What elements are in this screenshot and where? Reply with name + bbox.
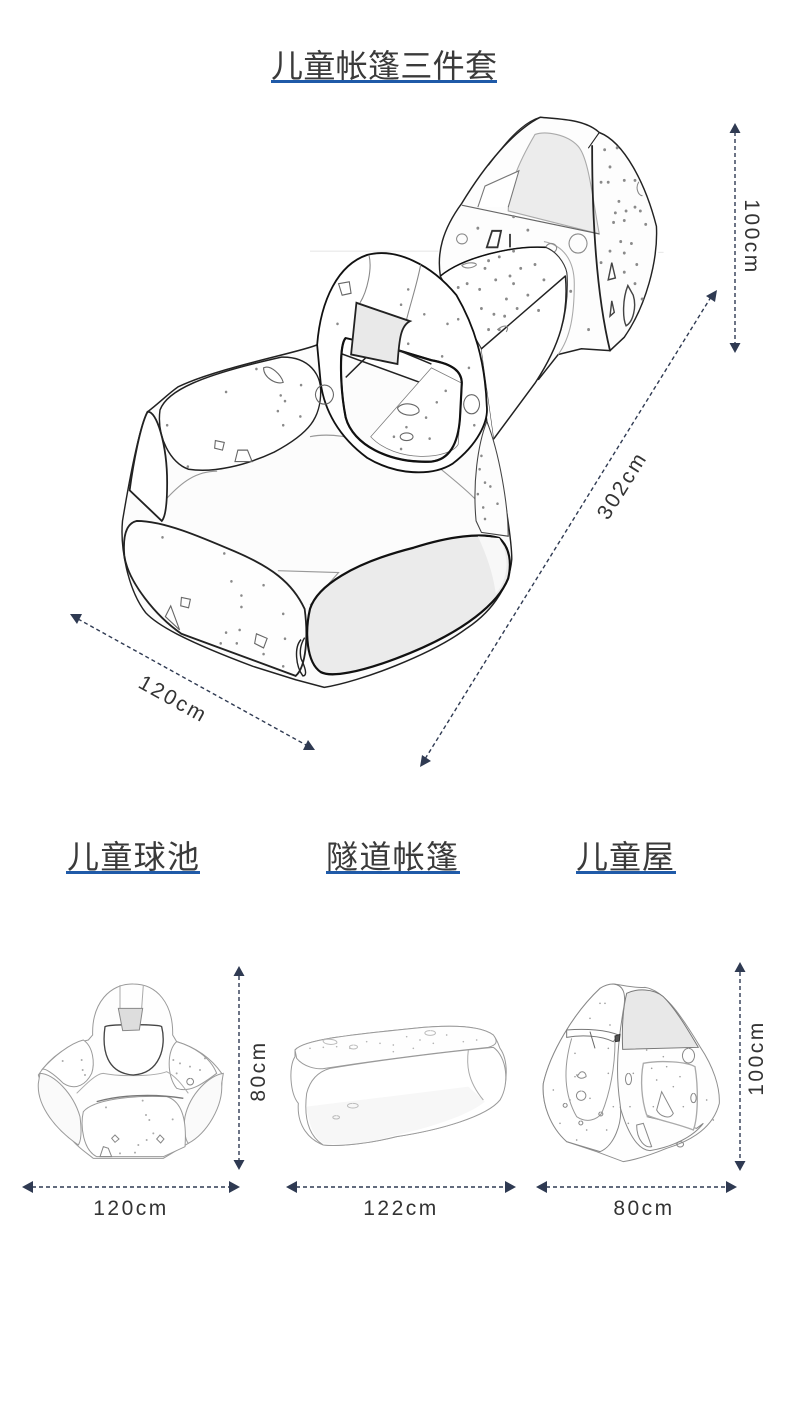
pool panel: front left [124, 521, 306, 676]
illustration: playhouse tent [543, 984, 719, 1162]
dimension: total length 302cm [420, 290, 717, 767]
dimension: pool width 120cm [22, 1181, 240, 1220]
dimension: pool width 120cm: 120cm [93, 1197, 169, 1220]
basket ring arch [317, 253, 487, 472]
zipper loop [297, 638, 306, 676]
pool panel: left side [130, 412, 167, 521]
dimension: tunnel length 122cm: 122cm [363, 1197, 439, 1220]
dimension: playhouse height 100cm [734, 962, 768, 1171]
basketball hoop [351, 303, 410, 364]
dimension: pool height 80cm [234, 966, 270, 1170]
illustration: assembled three piece tent [122, 117, 664, 687]
tent star pattern [478, 148, 646, 330]
tent dome at the back [439, 117, 657, 379]
dimension: pool height 80cm: 80cm [247, 1040, 270, 1102]
dimension: playhouse height 100cm: 100cm [745, 1020, 768, 1096]
dimension: playhouse width 80cm: 80cm [613, 1197, 675, 1220]
heading: playhouse: 儿童屋 [576, 839, 674, 875]
pool panel: right side [475, 421, 508, 536]
dimension: tent height 100cm: 100cm [740, 199, 763, 275]
connecting tunnel [440, 247, 567, 439]
pool panel: front right mesh [307, 535, 510, 674]
ring arch strap and print [360, 255, 421, 320]
ball pool outer wall [122, 345, 512, 687]
pool panel: back left [159, 357, 321, 470]
pool dots and print [162, 369, 497, 666]
illustration: ball pool [38, 984, 223, 1158]
view through the ring [371, 368, 462, 456]
dimension: total length 302cm: 302cm [593, 447, 652, 524]
illustration: tunnel tent [291, 1026, 506, 1145]
dimension: playhouse width 80cm [536, 1181, 737, 1220]
ball pool floor seams [167, 435, 478, 605]
dimension: pool width 120cm [70, 614, 315, 750]
heading: tunnel tent: 隧道帐篷 [326, 839, 458, 875]
dimension: tunnel length 122cm [286, 1181, 516, 1220]
dimension: tent height 100cm [730, 123, 763, 353]
title: three piece tent set: 儿童帐篷三件套 [271, 48, 497, 84]
heading: ball pool: 儿童球池 [67, 839, 199, 875]
dimension: pool width 120cm: 120cm [135, 671, 212, 728]
